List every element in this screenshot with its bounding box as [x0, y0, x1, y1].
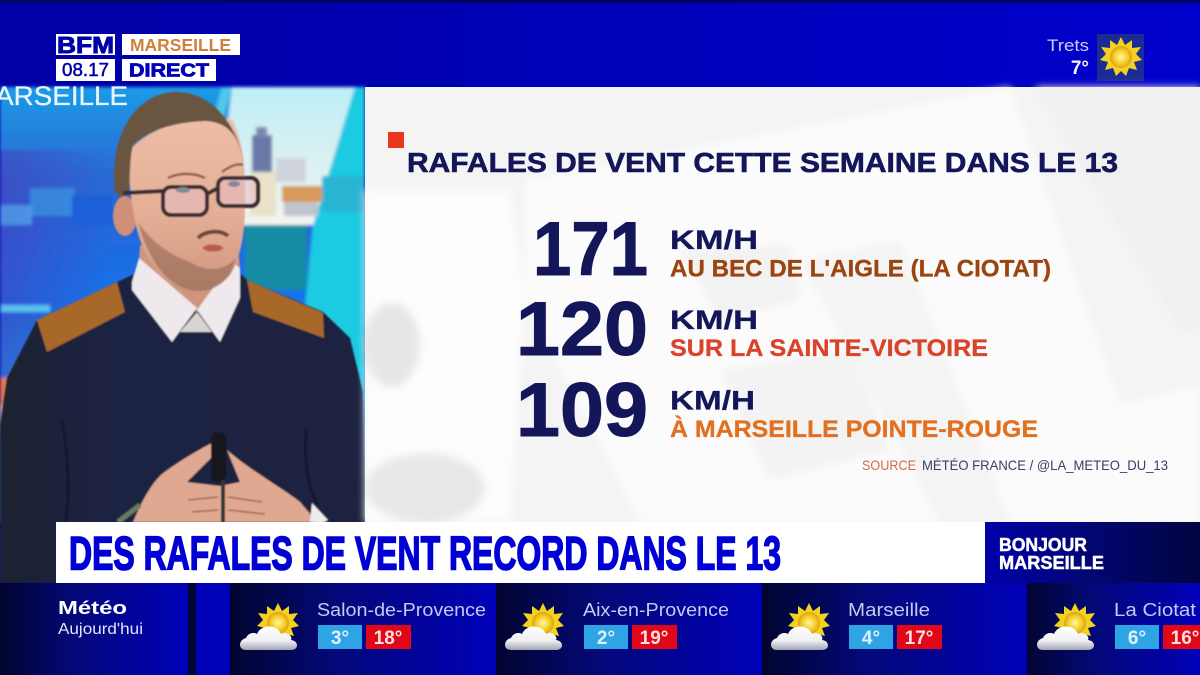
stat: 109 km/h: KM/H	[670, 386, 755, 416]
hair	[114, 92, 244, 197]
city silhouette left	[30, 188, 75, 216]
city: Marseille	[762, 583, 1027, 675]
time	[56, 59, 115, 81]
stat: 171 km/h: AU BEC DE L'AIGLE (LA CIOTAT)	[670, 256, 1051, 282]
time: 08.17	[62, 60, 109, 80]
city: Salon-de-Provence	[230, 583, 496, 675]
city: Salon-de-Provence: 3°	[331, 628, 349, 649]
city: Aix-en-Provence: Aix-en-Provence	[583, 600, 729, 620]
source: MÉTÉO FRANCE / @LA_METEO_DU_13	[922, 457, 1168, 473]
presenter	[0, 92, 365, 583]
hands	[133, 443, 220, 522]
microphone	[211, 432, 226, 482]
moustache and mouth	[198, 232, 228, 238]
city: La Ciotat: 6°	[1128, 628, 1146, 649]
weather strip	[0, 583, 1200, 675]
Marseille label: MARSEILLE	[130, 35, 231, 55]
local weather: Trets: 7°	[1071, 58, 1089, 79]
glasses	[123, 178, 258, 215]
stat: 109 km/h	[516, 368, 1038, 453]
local weather: Trets: Trets	[1047, 36, 1089, 55]
face	[129, 118, 245, 289]
city: Salon-de-Provence: 18°	[374, 628, 402, 649]
city: Aix-en-Provence: 2°	[597, 628, 615, 649]
weather title: Aujourd'hui	[58, 621, 143, 638]
local weather: Trets	[1047, 34, 1144, 81]
stat: 120 km/h: 120	[516, 287, 648, 372]
icon: sun	[1097, 34, 1144, 81]
eyebrows	[168, 164, 243, 178]
watermark BFM	[364, 87, 1200, 523]
presenter photo	[0, 81, 365, 583]
top banner	[0, 0, 1200, 87]
programme tag	[985, 522, 1200, 583]
marker square	[388, 132, 404, 148]
stat: 120 km/h: KM/H	[670, 305, 758, 335]
stat: 120 km/h: SUR LA SAINTE-VICTOIRE	[670, 335, 988, 362]
city: La Ciotat: 16°	[1171, 628, 1199, 649]
city: Aix-en-Provence	[496, 583, 762, 675]
stat: 120 km/h	[516, 287, 988, 372]
sleeve shading	[62, 420, 68, 523]
programme tag: MARSEILLE	[999, 553, 1104, 573]
source: SOURCE	[862, 457, 916, 473]
studio backdrop	[0, 87, 365, 523]
city: Marseille: Marseille	[848, 600, 930, 620]
city: La Ciotat	[1027, 583, 1200, 675]
city: Marseille: 4°	[862, 628, 880, 649]
stat: 109 km/h: À MARSEILLE POINTE-ROUGE	[670, 415, 1038, 443]
city: La Ciotat: La Ciotat	[1114, 600, 1196, 620]
city: Marseille: 17°	[905, 628, 933, 649]
weather title	[0, 583, 230, 675]
ear	[113, 196, 137, 236]
headline bar: DES RAFALES DE VENT RECORD DANS LE 13	[69, 526, 781, 580]
shoulder patches	[37, 282, 125, 352]
stat: 171 km/h	[533, 207, 1051, 292]
weather title: Météo	[58, 598, 127, 618]
city: Aix-en-Provence: 19°	[640, 628, 668, 649]
sweater	[0, 265, 365, 583]
city: Salon-de-Provence: Salon-de-Provence	[317, 600, 486, 620]
wrist band	[118, 505, 140, 522]
logo: BFM Marseille direct	[56, 32, 240, 81]
shirt collar	[132, 258, 197, 342]
city buildings	[250, 127, 365, 216]
sky panel	[215, 87, 355, 225]
panel: wind gusts	[364, 87, 1200, 523]
heading: RAFALES DE VENT CETTE SEMAINE DANS LE 13	[407, 147, 1118, 178]
teal block	[245, 225, 307, 290]
stat: 109 km/h: 109	[516, 368, 648, 453]
direct label: DIRECT	[129, 60, 209, 80]
direct label	[122, 59, 216, 81]
neck	[139, 245, 240, 312]
stat: 171 km/h: KM/H	[670, 225, 758, 255]
cyan wedge	[210, 87, 232, 130]
BFM logo box: BFM	[57, 32, 114, 58]
eyes	[176, 187, 190, 193]
stat: 171 km/h: 171	[533, 207, 648, 292]
finger shadows	[188, 497, 265, 514]
programme tag: BONJOUR	[999, 535, 1087, 555]
beard shadow	[138, 222, 236, 291]
